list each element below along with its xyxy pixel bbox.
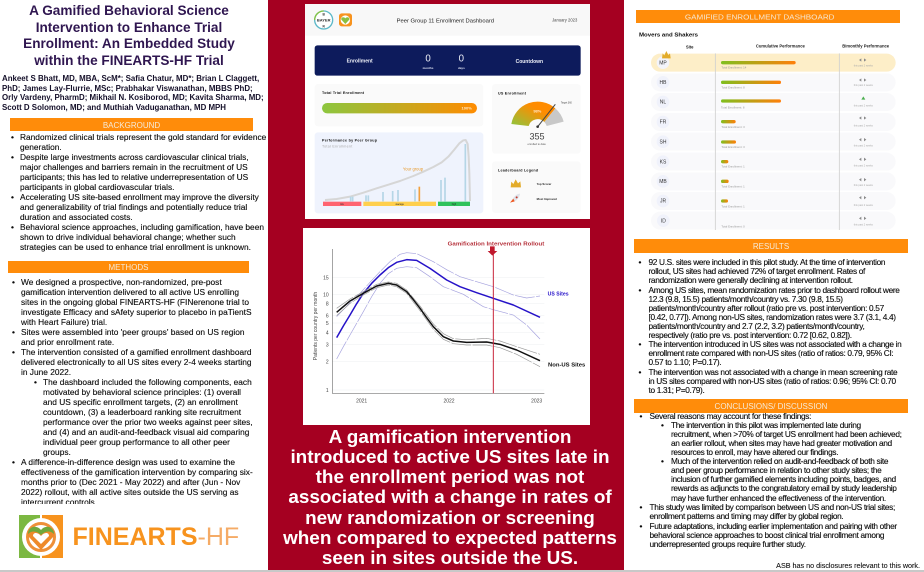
non-US sites label: Non-US Sites: [548, 363, 585, 369]
x axis labels: 2022: [443, 398, 455, 404]
icon: Bayer cross logo: R: [322, 24, 325, 28]
panel: US enrollment gauge: [492, 84, 581, 154]
authors: Orly Vardeny, PharmD; Mikhail N. Kosiborod, MD; Kavita Sharma, MD;: [2, 93, 264, 102]
sub-bullet: dashboard components: motivated by behavioral science principles: (1) overall: [43, 387, 241, 397]
bullet: randomization rates: patients/month/country and 2.7 (2.2, 3.2) patients/month/country,: [648, 321, 864, 331]
panel: conclusions and discussion: [634, 399, 908, 549]
bimonthly captions: [854, 65, 874, 227]
sub-bullet: audit and feedback: and peer group performance in relation to other study sites; the: [671, 465, 881, 475]
bullet: randomization rates: Among US sites, mean randomization rates prior to dashboard rollout were: [648, 284, 900, 294]
panel: enrollment countdown: months: [423, 66, 434, 70]
panel: leaderboard legend: [492, 161, 581, 213]
icon: FINEARTS heart: [339, 13, 352, 26]
authors: [2, 74, 264, 112]
bullet: gold standard: [20, 132, 266, 152]
bullet: pilot sites: [648, 258, 885, 285]
sub-bullet: implemented late: [671, 421, 902, 457]
bullet: peer groups: Sites were assembled into 'peer groups' based on US region: [21, 327, 244, 337]
disclosure note: ASB has no disclosures relevant to this work.: [776, 561, 920, 570]
x axis labels: 2021: [356, 398, 367, 404]
US sites label: US Sites: [548, 292, 569, 298]
panel: US enrollment gauge: 355: [529, 132, 545, 142]
bullet: behavioral science: shown to drive individual behavioral change; whether such: [20, 232, 236, 242]
total enrollment captions: Total Enrollment: 1: [721, 165, 745, 169]
panel: enrollment countdown: 0: [425, 54, 431, 65]
sub-bullet: dashboard components: countdown, (3) a leaderboard ranking site recruitment: [43, 407, 241, 417]
bullet: several reasons: Several reasons may account for these findings:: [650, 411, 811, 421]
conclusion callout: associated with a change in rates of: [288, 487, 612, 508]
bullet: screening rate: in US sites compared with non-US sites (ratio of ratios: 0.96; 95% CI: 0.70: [648, 376, 896, 386]
y axis labels: [323, 275, 329, 394]
panel: performance by peer group chart: average: [395, 203, 405, 206]
icon: rocket: [510, 194, 520, 203]
sub-bullet: implemented late: resources to enroll, may have altered our findings.: [671, 447, 838, 457]
title: [23, 3, 235, 68]
US sites confidence bands: [337, 253, 540, 359]
table row backgrounds: [651, 54, 896, 230]
icon: Bayer cross logo: BAYER: [317, 17, 331, 22]
table column headers: Bimonthly Performance: [842, 44, 890, 49]
text block: background: [11, 132, 266, 252]
bullet: accelerating enrollment: Accelerating US site-based enrollment may improve the diversity: [20, 192, 259, 202]
y axis labels: 15: [323, 275, 329, 281]
bullet: randomization rates: [648, 286, 900, 340]
dashboard title: Peer Group 11 Enrollment Dashboard: [397, 19, 494, 25]
panel: left column: [2, 3, 266, 558]
heading: methods: METHODS: [108, 263, 148, 272]
bullet: future adaptations: Future adaptations, including earlier implementation and pairing with other: [650, 520, 897, 530]
bimonthly captions: this past 2 weeks: [854, 105, 874, 108]
bullet: enrollment rate: [648, 340, 901, 367]
heading: background: [10, 118, 253, 131]
bullet: future adaptations: underrepresented groups require further study.: [650, 539, 806, 549]
title: within the FINEARTS-HF Trial: [34, 53, 224, 68]
bullet: limitation: [650, 503, 895, 521]
panel: leaderboard legend: Most Improved: [537, 197, 557, 201]
heading: methods: [8, 261, 249, 273]
bullet: randomization rates: [0.42, 0.77]). Among non-US sites, randomization rates were 3.7 (3.1, 4.4): [648, 312, 896, 322]
bullet: accelerating enrollment: [20, 192, 259, 222]
panel: performance by peer group chart: Your group: [403, 167, 424, 172]
panel: US enrollment gauge: Target 360: [561, 102, 573, 105]
site labels: [657, 56, 670, 227]
conclusion callout: introduced to active US sites late in: [290, 447, 610, 468]
sub-bullet: implemented late: The intervention in this pilot was implemented late during: [671, 420, 861, 430]
panel: enrollment countdown: 0: [459, 54, 464, 65]
total enrollment captions: Total Enrollment: 3: [721, 145, 745, 149]
heading: conclusions: [634, 399, 908, 413]
y axis labels: 8: [326, 302, 329, 308]
bullet: pilot sites: 92 U.S. sites were included in this pilot study. At the time of intervention: [648, 256, 885, 266]
bullet: peer groups: and prior enrollment rate.: [21, 337, 114, 347]
dashboard date: January 2023: [552, 18, 578, 23]
bullet: difference in difference: effectiveness of the gamification intervention by comparing six-: [21, 467, 253, 477]
bullet: randomization rates: 12.3 (9.8, 15.5) patients/month/country vs. 7.30 (9.8, 15.5): [648, 294, 843, 304]
panel: US enrollment gauge: US Enrollment: [498, 92, 527, 96]
table column headers: Site: [686, 45, 694, 50]
y axis labels: 10: [323, 292, 329, 298]
panel: US enrollment gauge: enrolled to date: [528, 142, 546, 146]
bullet: behavioral science: Behavioral science approaches, including gamification, have been: [20, 222, 264, 232]
bullet: pilot sites: rollout, US sites had achieved 72% of target enrollment. Rates of: [648, 266, 865, 276]
bullet: pilot sites: randomization were generally declining at intervention rollout.: [648, 275, 853, 285]
x axis labels: 2023: [531, 398, 542, 404]
authors: PhD; James Lay-Flurrie, MSc; Prabhakar Viswanathan, MBBS PhD;: [2, 84, 253, 93]
bullet: design: sites in the ongoing global FINEARTS-HF (FINerenone trial to: [21, 297, 249, 307]
sub-bullet: audit and feedback: Much of the intervention relied on audit-and-feedback of both site: [671, 456, 888, 466]
panel: leaderboard legend: Leaderboard Legend: [498, 168, 538, 172]
non-US confidence bands: [337, 282, 540, 367]
bullet: future adaptations: [650, 522, 897, 549]
heading: conclusions: CONCLUSIONS/ DISCUSSION: [715, 402, 827, 411]
x axis labels: [356, 398, 542, 404]
sub-bullet: dashboard components: performance over the prior two weeks against peer sites,: [43, 417, 253, 427]
subheading: movers and shakers: Movers and Shakers: [639, 33, 698, 39]
y axis labels: 4: [326, 330, 329, 336]
rollout label: Gamification Intervention Rollout: [448, 241, 545, 247]
panel: total trial enrollment: Total Trial Enrollment: [322, 91, 365, 95]
site labels: FR: [660, 120, 667, 126]
bullet: difference in difference: [21, 457, 253, 507]
conclusion callout: [283, 426, 617, 569]
title: A Gamified Behavioral Science: [29, 3, 229, 18]
non-US sites line: [337, 283, 540, 361]
site labels: KS: [660, 159, 667, 165]
panel: enrollment countdown: days: [458, 66, 465, 70]
panel: enrollment countdown: Enrollment: [347, 59, 373, 65]
y axis labels: 1: [326, 388, 329, 394]
bimonthly captions: this past 2 weeks: [854, 125, 874, 128]
site labels: MB: [659, 179, 667, 185]
site labels: NL: [660, 100, 666, 106]
sub-bullet: dashboard components: The dashboard included the following components, each: [43, 377, 252, 387]
bullet: intervention: [21, 347, 252, 377]
panel: performance by peer group chart: Performance by Peer Group: [322, 139, 378, 143]
authors: Scott D Solomon, MD; and Muthiah Vaduganathan, MD MPH: [2, 103, 226, 112]
bullet: peer groups: [21, 327, 244, 347]
panel: enrollment countdown: [315, 45, 581, 76]
sub-bullet: dashboard components: and US specific enrollment targets, (2) an enrollment: [43, 397, 238, 407]
bullet: design: We designed a prospective, non-randomized, pre-post: [21, 277, 222, 287]
title: Intervention to Enhance Trial: [36, 20, 222, 35]
bullet: design: investigate Efficacy and sAfety superior to placebo in paTientS: [21, 307, 252, 317]
icon: Bayer cross logo: B: [322, 13, 325, 17]
bimonthly captions: this past 2 weeks: [854, 164, 874, 167]
bullet: intervention: in June 2022.: [21, 367, 71, 377]
icon: crown: [511, 179, 521, 187]
table column headers: Cumulative Performance: [756, 44, 806, 49]
logo: FINEARTS-HF: [19, 515, 239, 558]
bullet: limitation: This study was limited by comparison between US and non-US trial sites;: [650, 502, 895, 512]
bimonthly captions: this past 2 weeks: [854, 84, 874, 87]
y axis title: Patients per country per month: [313, 292, 319, 360]
bullet: barriers: participants in global cardiovascular trials.: [20, 182, 174, 192]
panel: results: [634, 239, 908, 395]
conclusion callout: seen in sites outside the US.: [322, 548, 578, 569]
bullet: intervention: The intervention consisted of a gamified enrollment dashboard: [21, 347, 252, 357]
site labels: MP: [659, 60, 667, 66]
panel: total trial enrollment: 100%: [462, 106, 472, 111]
cumulative performance bars: [721, 61, 796, 203]
heading: results: [634, 239, 908, 253]
bullet: difference in difference: months prior to (Dec 2021 - May 2022) and after (Jun - Nov: [21, 477, 240, 487]
bullet: screening rate: [648, 368, 897, 395]
bimonthly trend arrows: [859, 58, 866, 220]
conclusion callout: A gamification intervention: [329, 426, 571, 448]
bullet: behavioral science: strategies can be used to enhance trial enrollment is unknown.: [20, 242, 251, 252]
bottom edge strip: [0, 570, 924, 572]
bullet: accelerating enrollment: duration and associated costs.: [20, 212, 133, 222]
bullet: design: [21, 277, 252, 327]
sub-bullet: audit and feedback: inclusion of further gamified elements including points, badges, and: [671, 474, 896, 484]
panel: performance by peer group chart: high: [452, 204, 457, 206]
bullet: screening rate: The intervention was not associated with a change in mean screening rate: [648, 366, 897, 376]
panel: leaderboard legend: Top Scorer: [537, 182, 552, 186]
panel: patients per month line chart: [303, 228, 590, 425]
heading: results: RESULTS: [753, 242, 789, 251]
bullet: difference in difference: 2022) rollout, with all active sites outside the US serving as: [21, 487, 239, 497]
sub-bullet: dashboard components: individual peer group performance to all other peer: [43, 437, 230, 447]
bullet: future adaptations: behavioral science approaches to boost clinical trial enrollment among: [650, 530, 884, 540]
bullet: accelerating enrollment: and generalizability of trial findings and potentially reduce trial: [20, 202, 247, 212]
sub-bullet: audit and feedback: may have further enhanced the effectiveness of the intervention.: [671, 493, 886, 503]
total enrollment captions: Total Enrollment: 8: [721, 85, 745, 89]
table column headers: [686, 44, 890, 50]
sub-bullet: audit and feedback: [671, 457, 897, 503]
conclusion callout: the enrollment period was not: [316, 467, 584, 488]
panel: performance by peer group chart: low: [340, 204, 344, 206]
title: Enrollment: An Embedded Study: [23, 36, 235, 51]
total enrollment captions: Total Enrollment: 1: [721, 185, 745, 189]
sub-bullet: dashboard components: [43, 377, 253, 457]
bullet: randomization rates: respectively (ratio pre vs. post intervention: 0.72 [0.62, 0.82]).: [648, 330, 852, 340]
panel: US enrollment gauge: 98%: [533, 108, 542, 113]
sub-bullet: implemented late: recruitment, when >70% of target US enrollment had been achieved;: [671, 429, 902, 439]
site labels: HB: [660, 80, 667, 86]
total enrollment captions: Total Enrollment: 0: [721, 224, 745, 228]
icon: Bayer cross logo: [315, 11, 333, 29]
y axis labels: 5: [326, 321, 329, 327]
conclusion callout: when compared to expected patterns: [283, 528, 617, 549]
bullet: gold standard: Randomized clinical trials represent the gold standard for evidence: [20, 132, 266, 142]
bullet: difference in difference: A difference-in-difference design was used to examine the: [21, 457, 235, 467]
bimonthly captions: this past 2 weeks: [854, 204, 874, 207]
y axis labels: 2: [326, 359, 329, 365]
icon: heart logo: [19, 515, 63, 558]
panel: performance by peer group chart: [315, 132, 483, 213]
bullet: barriers: major challenges and barriers remain in the recruitment of US: [20, 162, 248, 172]
bullet: barriers: [20, 152, 249, 192]
text block: methods: [12, 277, 253, 504]
bullet: enrollment rate: The intervention introduced in US sites was not associated with a change in: [648, 339, 901, 349]
heading: background: BACKGROUND: [103, 121, 160, 130]
total enrollment captions: Total Enrollment: 14: [721, 66, 747, 70]
logo wordmark: FINEARTS-HF: [72, 523, 239, 551]
panel: red center column: [268, 0, 624, 572]
bullet: design: with Heart Failure) trial.: [21, 317, 107, 327]
bullet: barriers: Despite large investments across cardiovascular clinical trials,: [20, 152, 249, 162]
total enrollment captions: Total Enrollment: 1: [721, 204, 745, 208]
site labels: SH: [660, 139, 667, 145]
bullet: behavioral science: [20, 222, 264, 252]
sub-bullet: dashboard components: groups.: [43, 447, 71, 457]
bullet: intervention: delivered electronically to all US sites every 2-4 weeks starting: [21, 357, 251, 367]
y axis labels: 6: [326, 313, 329, 319]
rollout marker line: [492, 247, 495, 393]
bimonthly captions: this past 2 weeks: [854, 224, 874, 227]
bullet: design: gamification intervention delivered to all active US enrolling: [21, 287, 239, 297]
total enrollment captions: Total Enrollment: 3: [721, 125, 745, 129]
icon: crown: [662, 51, 671, 58]
US sites line: [337, 260, 540, 338]
site labels: JR: [660, 199, 666, 205]
arrow: rollout: [488, 246, 497, 256]
bullet: limitation: enrollment patterns and timing may differ by global region.: [650, 511, 843, 521]
bullet: enrollment rate: 0.57 to 1.10; P=0.17).: [648, 357, 721, 367]
bullet: screening rate: to 1.31; P=0.79).: [648, 385, 704, 395]
conclusion callout: new randomization or screening: [305, 508, 595, 528]
panel: performance by peer group chart: Total Enrollment: [322, 144, 352, 148]
sub-bullet: dashboard components: and (4) and an audit-and-feedback visual aid comparing: [43, 427, 249, 437]
bullet: enrollment rate: enrollment rate compared with non-US sites (ratio of ratios: 0.79, 95% CI:: [648, 348, 893, 358]
panel: gamified enrollment dashboard table: [636, 10, 900, 230]
bullet: barriers: participants; this has led to relative underrepresentation of US: [20, 172, 248, 182]
bullet: randomization rates: patients/month/country after rollout (ratio pre vs. post intervention: 0.57: [648, 303, 884, 313]
site labels: ID: [661, 218, 666, 224]
bimonthly captions: this past 2 weeks: [854, 184, 874, 187]
bullet: gold standard: generation.: [20, 142, 62, 152]
total enrollment captions: Total Enrollment: 8: [721, 105, 745, 109]
panel: gamified dashboard screenshot: [305, 4, 590, 219]
sub-bullet: audit and feedback: rewards as adjuncts to the congratulatory email by study leadership: [671, 483, 897, 493]
panel: enrollment countdown: Countdown: [516, 59, 543, 65]
bimonthly captions: this past 2 weeks: [854, 145, 874, 148]
panel: total trial enrollment: [315, 84, 483, 126]
heading: gamified enrollment dashboard: [636, 10, 900, 23]
heading: gamified enrollment dashboard: GAMIFIED ENROLLMENT DASHBOARD: [685, 13, 835, 22]
total enrollment captions: [721, 66, 747, 228]
sub-bullet: implemented late: an earlier rollout, when sites may have had greater motivation and: [671, 438, 892, 448]
authors: Ankeet S Bhatt, MD, MBA, ScM*; Safia Chatur, MD*; Brian L Claggett,: [2, 74, 259, 83]
bimonthly captions: this past 2 weeks: [854, 65, 874, 68]
y axis labels: 3: [326, 342, 329, 348]
